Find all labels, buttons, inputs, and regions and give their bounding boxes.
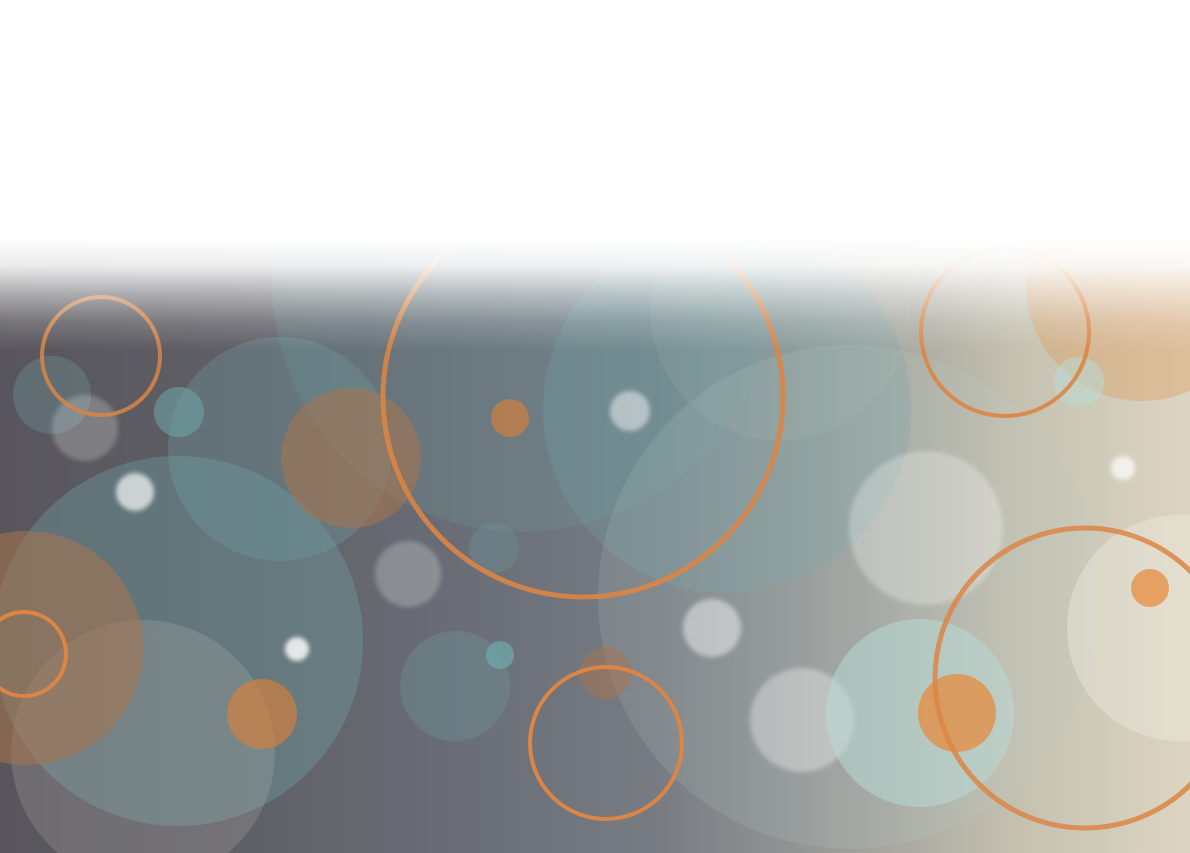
soft white circles [52, 391, 1135, 772]
large teal circles [0, 32, 911, 826]
white top fade [0, 0, 1190, 350]
pale translucent circles [11, 180, 1190, 853]
orange filled circles [0, 169, 1190, 765]
small orange dots [227, 399, 1169, 752]
light teal circles [826, 357, 1104, 807]
orange rings [0, 197, 1190, 828]
